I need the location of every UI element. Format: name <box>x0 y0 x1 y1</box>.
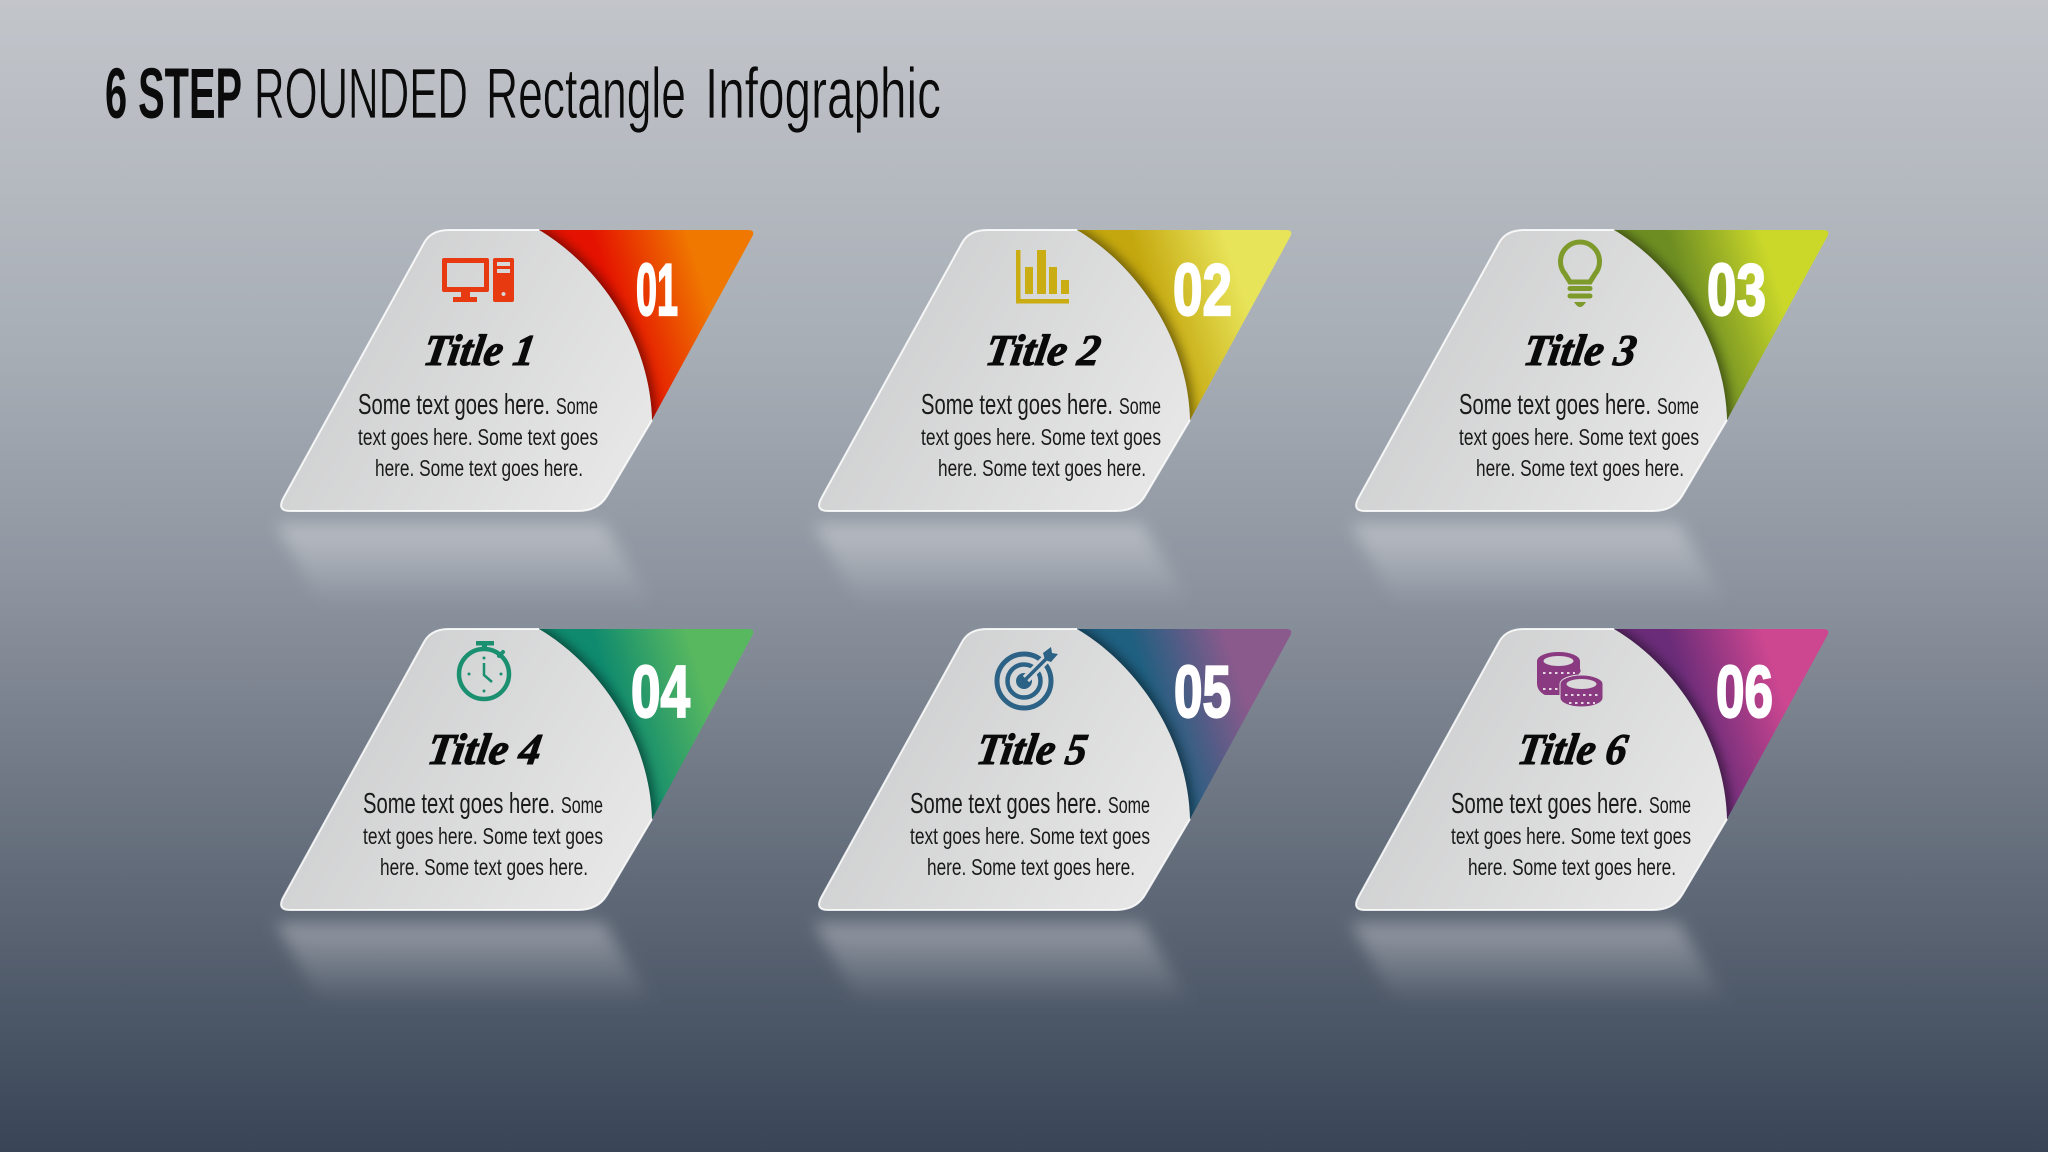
number 01: 01 <box>636 250 678 331</box>
title: 6 STEP <box>105 55 242 134</box>
card <box>819 230 1190 511</box>
reflection <box>814 524 1192 606</box>
text block: Some text goes here. <box>921 389 1113 421</box>
text block: text goes here. Some text goes <box>363 823 603 849</box>
tab shadow <box>540 230 662 420</box>
panel: step 4 <box>276 627 753 1005</box>
text block: text goes here. Some text goes <box>910 823 1150 849</box>
reflection <box>1351 923 1729 1005</box>
text block <box>921 389 1161 481</box>
text block: Some <box>1108 792 1150 818</box>
text block <box>1459 389 1699 481</box>
icon: computer <box>442 258 514 302</box>
text block: here. Some text goes here. <box>1468 854 1676 880</box>
tab shadow <box>1614 230 1736 420</box>
tab shadow <box>540 629 660 819</box>
reflection <box>1351 524 1729 606</box>
icon: target <box>997 647 1058 708</box>
number 06: 06 <box>1716 652 1773 733</box>
tab shadow <box>1078 230 1199 420</box>
number 04: 04 <box>631 652 690 733</box>
text block: text goes here. Some text goes <box>1451 823 1691 849</box>
text block <box>363 788 603 880</box>
panel: step 1 <box>276 228 753 606</box>
number 02: 02 <box>1173 250 1232 331</box>
heading: title 4: Title 4 <box>424 725 545 774</box>
reflection <box>814 923 1192 1005</box>
card edge <box>1356 230 1727 511</box>
number 03: 03 <box>1707 250 1766 331</box>
text block: Some <box>1649 792 1691 818</box>
tab shadow <box>1614 629 1735 819</box>
card edge <box>819 629 1190 910</box>
heading: title 2: Title 2 <box>982 326 1104 375</box>
text block: Some text goes here. <box>1459 389 1651 421</box>
number tab <box>1614 230 1828 420</box>
card <box>281 629 652 910</box>
text block: here. Some text goes here. <box>1476 455 1684 481</box>
tab shadow <box>1078 629 1198 819</box>
text block <box>910 788 1150 880</box>
text block: here. Some text goes here. <box>375 455 583 481</box>
panel: step 2 <box>814 228 1291 606</box>
text block <box>1451 788 1691 880</box>
card <box>819 629 1190 910</box>
card edge <box>281 629 652 910</box>
text block: Some text goes here. <box>363 788 555 820</box>
icon: bar chart <box>1016 250 1069 304</box>
icon: stopwatch <box>459 641 509 699</box>
text block: Some text goes here. <box>910 788 1102 820</box>
text block: here. Some text goes here. <box>380 854 588 880</box>
text block: Some <box>1119 393 1161 419</box>
number tab <box>539 230 753 420</box>
text block: Some <box>561 792 603 818</box>
text block: text goes here. Some text goes <box>921 424 1161 450</box>
text block: here. Some text goes here. <box>927 854 1135 880</box>
card edge <box>819 230 1190 511</box>
heading: title 5: Title 5 <box>973 725 1091 774</box>
title: Rectangle <box>486 55 686 134</box>
heading: title 6: Title 6 <box>1514 725 1632 774</box>
reflection <box>276 923 654 1005</box>
text block: Some text goes here. <box>1451 788 1643 820</box>
card edge <box>281 230 652 511</box>
reflection <box>276 524 654 606</box>
panel: step 5 <box>814 627 1291 1005</box>
panel: step 6 <box>1351 627 1828 1005</box>
panel: step 3 <box>1351 228 1828 606</box>
card <box>1356 629 1727 910</box>
title: ROUNDED <box>254 55 468 134</box>
number tab <box>1614 629 1828 819</box>
heading: title 3: Title 3 <box>1520 326 1640 375</box>
card <box>281 230 652 511</box>
number 05: 05 <box>1174 652 1231 733</box>
title: Infographic <box>705 55 941 134</box>
text block: text goes here. Some text goes <box>358 424 598 450</box>
text block: text goes here. Some text goes <box>1459 424 1699 450</box>
text block: here. Some text goes here. <box>938 455 1146 481</box>
heading: title 1: Title 1 <box>420 326 539 375</box>
card <box>1356 230 1727 511</box>
text block: Some <box>1657 393 1699 419</box>
text block: Some <box>556 393 598 419</box>
icon: light bulb <box>1560 242 1600 307</box>
text block: Some text goes here. <box>358 389 550 421</box>
number tab <box>1077 629 1291 819</box>
icon: coins <box>1537 652 1603 707</box>
text block <box>358 389 598 481</box>
title <box>105 55 941 134</box>
number tab <box>539 629 753 819</box>
card edge <box>1356 629 1727 910</box>
number tab <box>1077 230 1291 420</box>
